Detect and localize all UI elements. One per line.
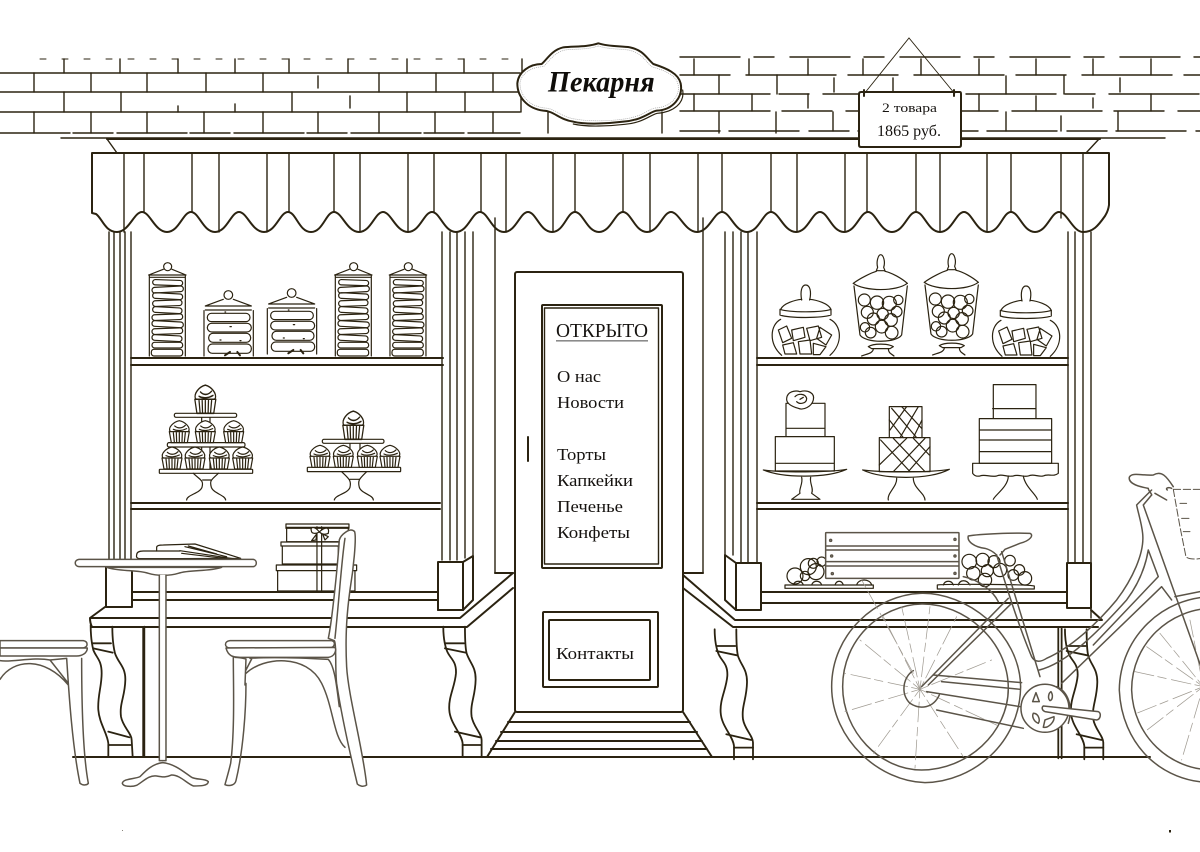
door menu: products: Капкейки bbox=[557, 471, 633, 490]
cake with lattice bbox=[863, 407, 949, 500]
door lower panel bbox=[543, 612, 658, 687]
gift boxes bbox=[276, 524, 357, 591]
door menu: about: Новости bbox=[557, 393, 624, 412]
door menu: about bbox=[557, 367, 624, 412]
books on table bbox=[136, 544, 241, 559]
leg: right of door bbox=[715, 629, 753, 759]
shelf: cookie jars bbox=[149, 263, 427, 356]
shelf: cupcake stands bbox=[159, 385, 401, 500]
cupcake stand large bbox=[159, 385, 253, 500]
cake with flower bbox=[763, 391, 847, 499]
bakery sign: Пекарня bbox=[547, 66, 655, 99]
frame tubes bbox=[862, 490, 1200, 687]
leg: far right bbox=[1058, 628, 1103, 759]
cupcake stand small bbox=[307, 411, 401, 500]
bakery sign bbox=[517, 43, 683, 126]
cart sign: 2 товара bbox=[882, 100, 937, 115]
door menu: products: Конфеты bbox=[557, 523, 631, 542]
cart sign: 1865 руб. bbox=[877, 123, 941, 140]
pastries left bbox=[785, 557, 873, 588]
chair right bbox=[225, 530, 367, 786]
door menu: products: Печенье bbox=[557, 497, 623, 516]
awning bbox=[92, 153, 1109, 232]
bicycle bbox=[832, 473, 1200, 783]
counter and legs bbox=[73, 573, 1150, 759]
left window frame bbox=[106, 218, 495, 610]
pastries right bbox=[937, 553, 1034, 589]
front wheel bbox=[1119, 597, 1200, 783]
saddle bbox=[968, 533, 1032, 555]
basket bbox=[1173, 489, 1200, 559]
shelf: crate and pastries bbox=[785, 533, 1034, 589]
door steps bbox=[487, 712, 712, 757]
cafe table bbox=[75, 544, 256, 786]
brick wall bbox=[0, 57, 1200, 133]
chain and crank bbox=[927, 675, 1100, 732]
chair left bbox=[0, 641, 88, 785]
rear wheel bbox=[832, 593, 1021, 783]
cart sign bbox=[859, 38, 961, 147]
door menu: about: О нас bbox=[557, 367, 601, 386]
door menu: products bbox=[557, 445, 633, 542]
shelf: candy jars bbox=[772, 254, 1060, 356]
door handle bbox=[527, 437, 529, 461]
leg: far left bbox=[91, 625, 144, 757]
door window bbox=[542, 305, 662, 568]
wooden crate bbox=[826, 533, 959, 578]
door menu: products: Торты bbox=[557, 445, 607, 464]
right window frame bbox=[703, 218, 1091, 618]
handlebar bbox=[1129, 473, 1173, 495]
shelf: cakes bbox=[763, 385, 1058, 500]
door sign: open: ОТКРЫТО bbox=[556, 320, 648, 342]
cake with stripes bbox=[973, 385, 1058, 499]
leg: left of door bbox=[443, 627, 482, 757]
ledge bbox=[61, 138, 1165, 153]
door bbox=[515, 272, 683, 712]
door lower panel: Контакты bbox=[556, 644, 635, 663]
